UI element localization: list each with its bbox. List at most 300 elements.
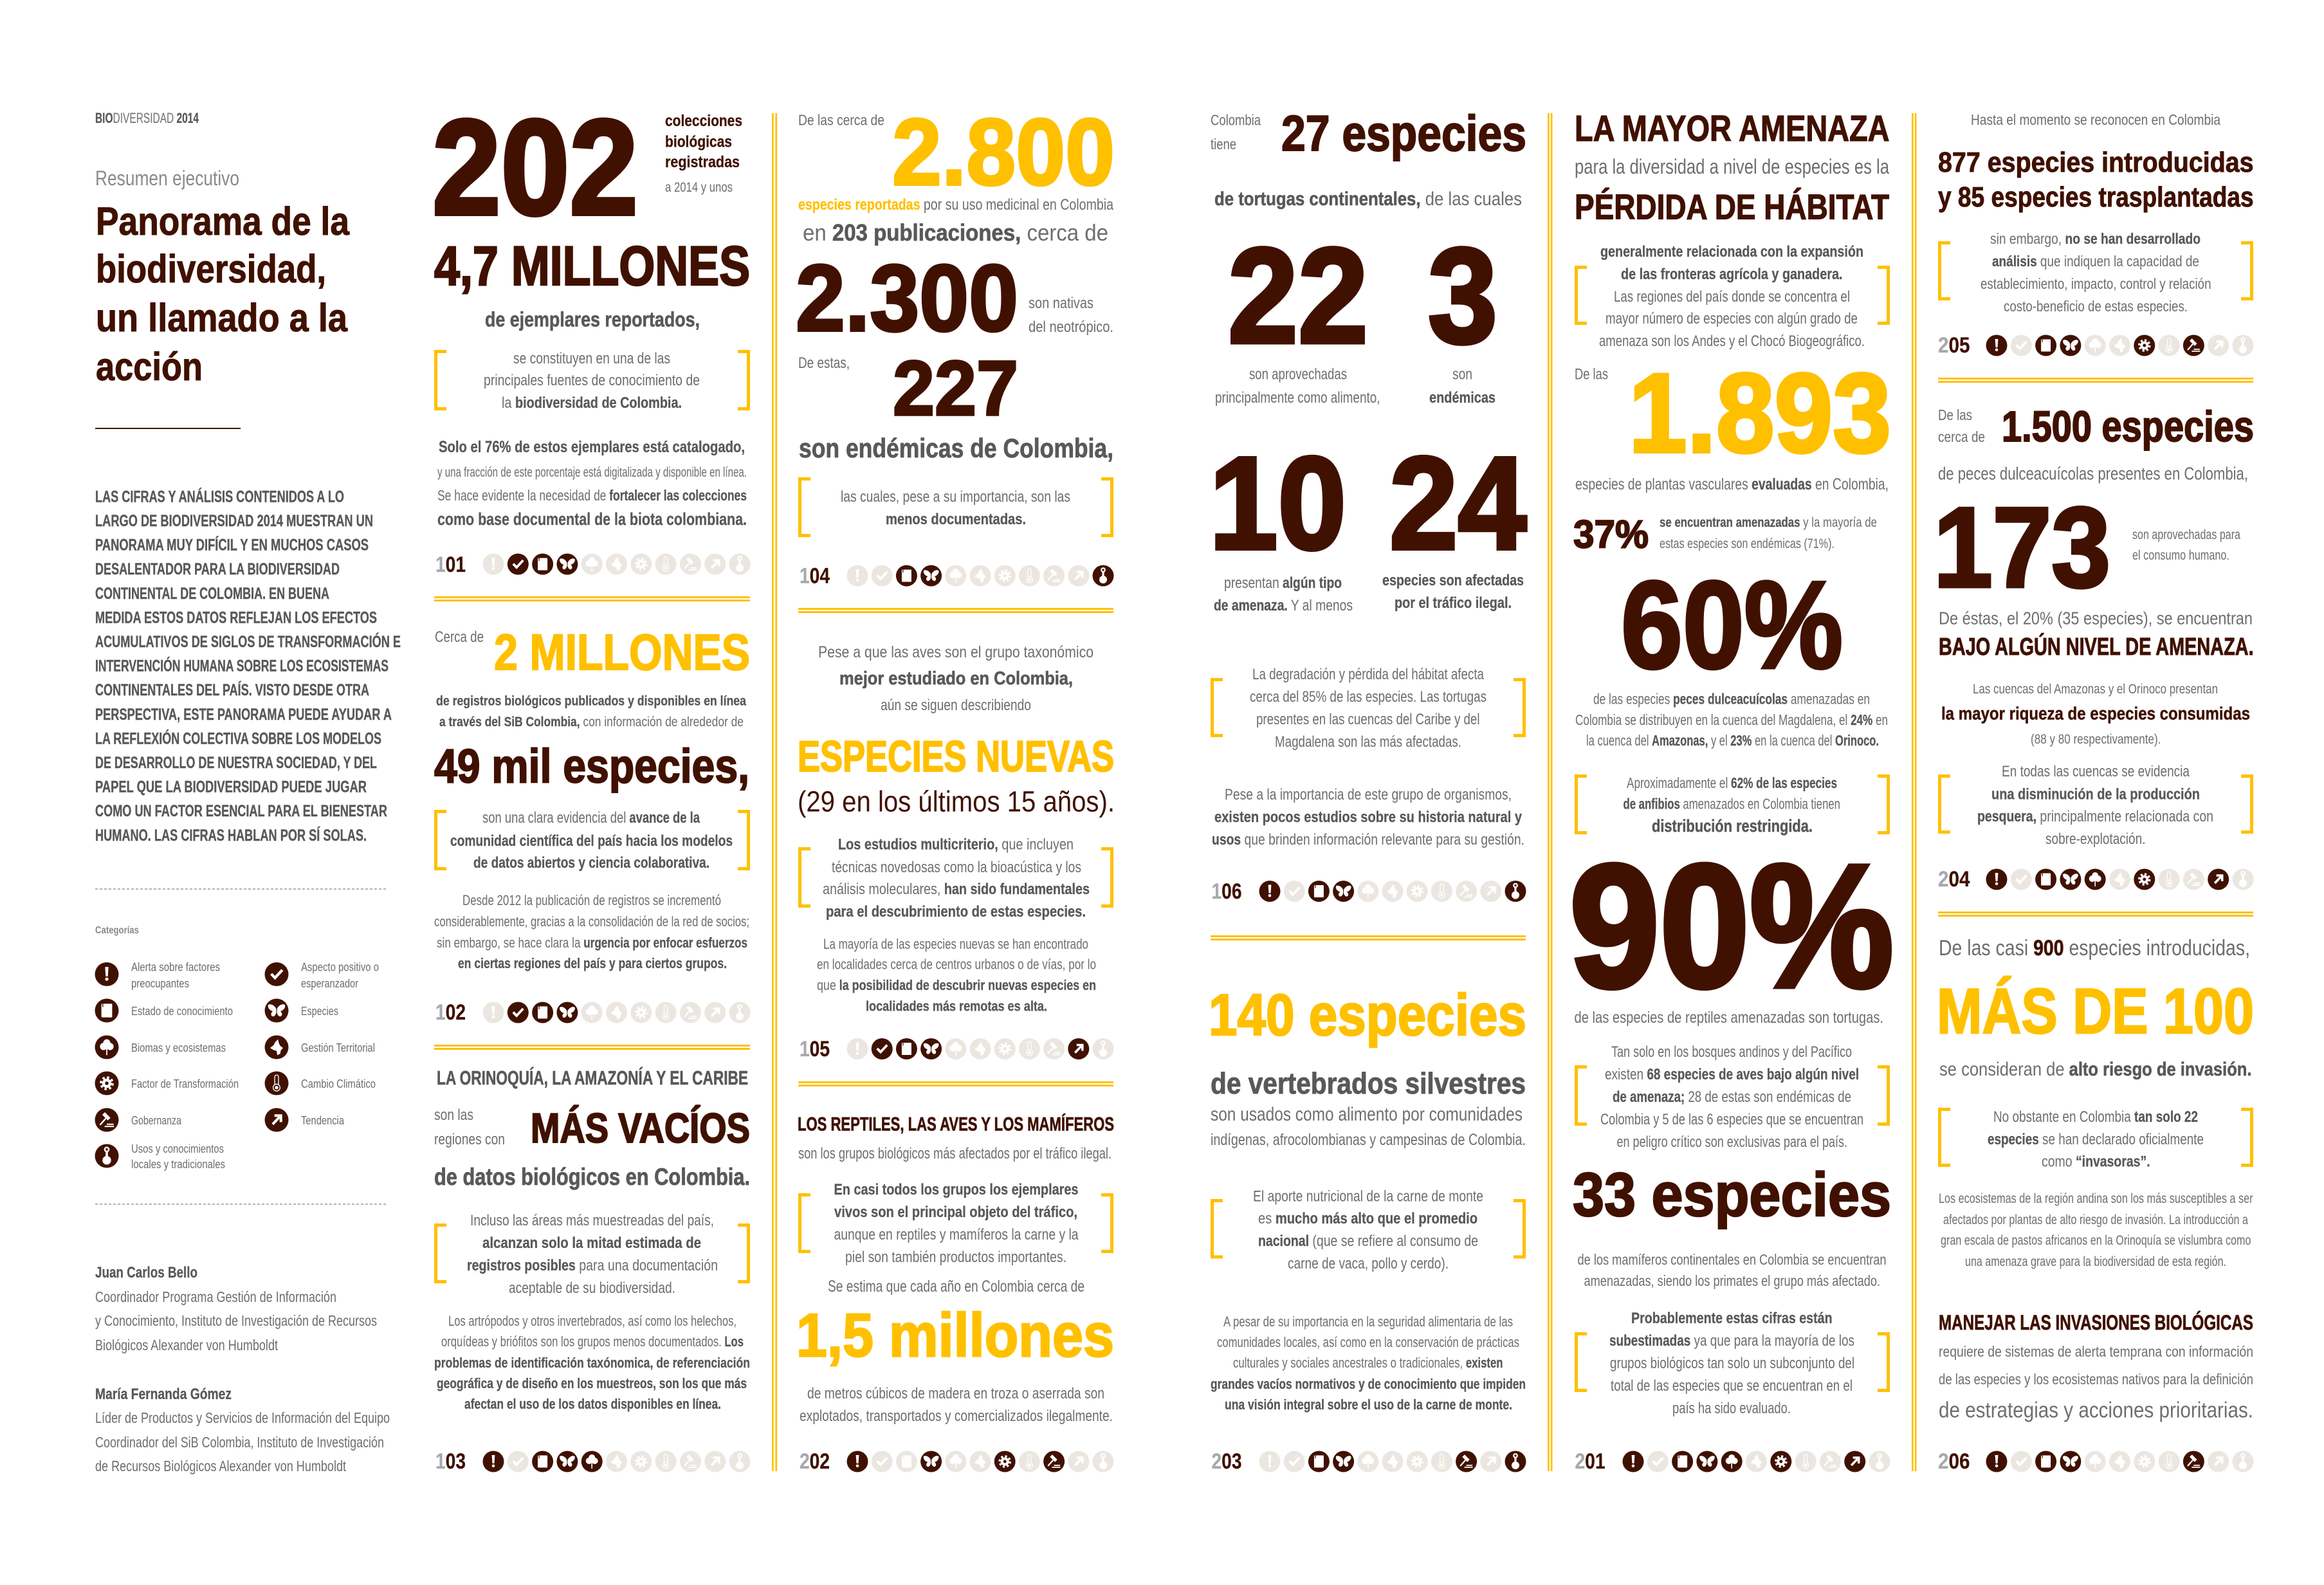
text block: de vertebrados silvestres <box>1211 1067 1526 1100</box>
stat caption: a 2014 y unos <box>665 180 733 195</box>
icon row: 101: 101 <box>435 553 466 577</box>
stat: 1.500 especies: De las <box>1938 407 1972 423</box>
callout: nacional (que se refiere al consumo de <box>1258 1232 1478 1250</box>
callout: costo-beneficio de estas especies. <box>2004 298 2188 315</box>
text block: de los mamíferos continentales en Colombia se encuentran <box>1577 1251 1886 1268</box>
icon row: 106 <box>1212 879 1526 904</box>
text block <box>1577 1251 1886 1289</box>
text block: sin embargo, se hace clara la urgencia por enfocar esfuerzos <box>437 935 747 951</box>
text block: en 203 publicaciones, cerca de <box>803 219 1108 246</box>
stat: 1,5 millones: Se estima que cada año en Colombia cerca de <box>828 1278 1084 1296</box>
stat: 1.893: 1.893 <box>1629 351 1891 476</box>
callout <box>436 350 749 412</box>
panel: column 5 <box>1934 111 2254 1474</box>
callout: de las fronteras agrícola y ganadera. <box>1621 266 1842 283</box>
heading: reptiles, aves, mamíferos: LOS REPTILES, LAS AVES Y LOS MAMÍFEROS <box>798 1113 1114 1135</box>
heading: manejar las invasiones <box>1939 1311 2253 1423</box>
stat: 1,5 millones: 1,5 millones <box>796 1301 1114 1370</box>
callout: la biodiversidad de Colombia. <box>502 394 682 412</box>
text block: existen pocos estudios sobre su historia natural y <box>1214 809 1523 826</box>
stat: 37% <box>1573 512 1877 556</box>
stat: 1.893: especies de plantas vasculares evaluadas en Colombia, <box>1575 475 1889 493</box>
text block: la cuenca del Amazonas, y el 23% en la cuenca del Orinoco. <box>1586 732 1879 749</box>
stat: 140 especies: 140 especies <box>1209 983 1526 1048</box>
stat: 2 millones: 2 MILLONES <box>494 623 750 681</box>
legend: categories: esperanzador <box>301 977 358 990</box>
stat: 2.300: 2.300 <box>796 246 1018 351</box>
stat: 27 especies: tiene <box>1211 136 1236 152</box>
callout <box>1576 774 1889 836</box>
stat: 1.500 especies: 1.500 especies <box>2002 403 2254 451</box>
icon row: 203: 203 <box>1212 1449 1241 1474</box>
stat: 173: el consumo humano. <box>2132 548 2229 563</box>
heading: especies nuevas <box>798 732 1115 818</box>
callout: de amenaza; 28 de estas son endémicas de <box>1613 1088 1851 1106</box>
text block: problemas de identificación taxónomica, de referenciación <box>434 1355 750 1371</box>
text block: Pese a la importancia de este grupo de organismos, <box>1225 786 1512 803</box>
heading: especies introducidas <box>1938 111 2254 213</box>
panel: introduction sidebar <box>95 110 401 1474</box>
callout: como “invasoras”. <box>2042 1153 2150 1171</box>
text block: Desde 2012 la publicación de registros se incrementó <box>462 892 721 908</box>
heading: más de 100: De las casi 900 especies introducidas, <box>1939 936 2250 960</box>
heading: más de 100: MÁS DE 100 <box>1937 975 2254 1047</box>
callout: Magdalena son las más afectadas. <box>1275 733 1461 751</box>
callout: existen 68 especies de aves bajo algún nivel <box>1605 1066 1859 1083</box>
callout <box>1576 1043 1889 1151</box>
stat: 1,5 millones <box>796 1278 1114 1370</box>
legend: categories: Usos y conocimientos <box>131 1142 224 1155</box>
callout: Probablemente estas cifras están <box>1631 1310 1833 1327</box>
text block <box>1212 786 1524 848</box>
icon row: 103: 103 <box>435 1449 466 1474</box>
callout: subestimadas ya que para la mayoría de los <box>1609 1332 1854 1350</box>
icon row: 104: 104 <box>800 563 830 588</box>
callout: cerca del 85% de las especies. Las tortugas <box>1250 688 1487 706</box>
intro paragraph: COMO UN FACTOR ESENCIAL PARA EL BIENESTAR <box>95 802 387 820</box>
stat: 27 especies: 27 especies <box>1281 105 1526 161</box>
callout <box>1212 666 1524 751</box>
stat: 24: 24 <box>1389 430 1526 577</box>
subheading: de ejemplares reportados, <box>485 307 700 331</box>
stat caption: registradas <box>665 153 740 171</box>
icon row: 205 <box>1938 333 2254 358</box>
callout: es mucho más alto que el promedio <box>1258 1210 1478 1227</box>
callout: total de las especies que se encuentran en el <box>1611 1377 1853 1395</box>
text block: especies reportadas por su uso medicinal en Colombia <box>798 196 1114 214</box>
authors <box>95 1264 390 1474</box>
icon row: 101 <box>435 553 750 577</box>
heading: más vacíos: son las <box>434 1106 473 1124</box>
heading: más de 100: se consideran de alto riesgo de invasión. <box>1939 1059 2251 1080</box>
legend: categories: Biomas y ecosistemas <box>131 1041 226 1054</box>
heading: más vacíos: regiones con <box>434 1131 505 1148</box>
title: un llamado a la <box>96 296 348 340</box>
icon row: 202 <box>800 1449 1114 1474</box>
authors: de Recursos Biológicos Alexander von Humboldt <box>95 1458 346 1474</box>
text block: Colombia se distribuyen en la cuenca del Magdalena, el 24% en <box>1575 711 1888 728</box>
icon row: 203 <box>1212 1449 1526 1474</box>
text block: y una fracción de este porcentaje está digitalizada y disponible en línea. <box>437 465 747 480</box>
text block: a través del SiB Colombia, con información de alrededor de <box>439 715 744 729</box>
callout: aceptable de su biodiversidad. <box>509 1279 675 1297</box>
stat: 2.800 <box>798 100 1115 205</box>
legend: categories: Especies <box>301 1005 338 1018</box>
icon row: 104 <box>800 563 1114 588</box>
heading: especies introducidas: 877 especies introducidas <box>1938 147 2254 178</box>
text block: una amenaza grave para la biodiversidad de esta región. <box>1965 1254 2226 1269</box>
intro paragraph: ACUMULATIVOS DE SIGLOS DE TRANSFORMACIÓN E <box>95 632 401 651</box>
callout <box>1212 1188 1524 1272</box>
callout: En casi todos los grupos los ejemplares <box>834 1181 1078 1198</box>
callout: aunque en reptiles y mamíferos la carne y la <box>834 1226 1079 1243</box>
text block: comunidades locales, así como en la conservación de prácticas <box>1217 1334 1519 1350</box>
stat: 2 millones: Cerca de <box>435 628 484 646</box>
legend: categories: Tendencia <box>301 1114 345 1127</box>
callout: vivos son el principal objeto del tráfico, <box>834 1204 1077 1221</box>
intro paragraph: HUMANO. LAS CIFRAS HABLAN POR SÍ SOLAS. <box>95 826 367 845</box>
text block: como base documental de la biota colombiana. <box>437 509 747 529</box>
callout: No obstante en Colombia tan solo 22 <box>1993 1108 2198 1126</box>
text block: orquídeas y briófitos son los grupos menos documentados. Los <box>441 1333 744 1350</box>
text block: usos que brinden información relevante para su gestión. <box>1212 831 1524 848</box>
intro paragraph: DESALENTADOR PARA LA BIODIVERSIDAD <box>95 560 340 578</box>
heading: la mayor amenaza: LA MAYOR AMENAZA <box>1575 108 1890 149</box>
heading: manejar las invasiones: requiere de sistemas de alerta temprana con información <box>1939 1343 2253 1360</box>
title: Panorama de la <box>96 199 350 243</box>
icon row: 102: 102 <box>435 1000 466 1025</box>
authors: Biológicos Alexander von Humboldt <box>95 1337 278 1353</box>
text block: La mayoría de las especies nuevas se han encontrado <box>823 936 1088 952</box>
callout: carne de vaca, pollo y cerdo). <box>1288 1255 1449 1272</box>
subheading: de tortugas continentales, de las cuales <box>1214 188 1522 210</box>
callout: generalmente relacionada con la expansión <box>1600 243 1863 261</box>
text block: Pese a que las aves son el grupo taxonómico <box>818 643 1093 661</box>
text block: localidades más remotas es alta. <box>866 998 1047 1014</box>
text block: aún se siguen describiendo <box>881 697 1031 714</box>
text block <box>1939 609 2254 747</box>
stat: 27 especies: Colombia <box>1211 112 1261 129</box>
stat: 49 mil especies: 49 mil especies, <box>434 740 749 792</box>
icon row: 202: 202 <box>800 1449 830 1474</box>
text block <box>1211 1067 1526 1149</box>
callout: análisis que indiquen la capacidad de <box>1992 253 2199 270</box>
text block: en ciertas regiones del país y para ciertos grupos. <box>458 955 727 971</box>
text block: considerablemente, gracias a la consolidación de la red de socios; <box>434 913 749 930</box>
text block: (88 y 80 respectivamente). <box>2031 732 2161 747</box>
callout: principales fuentes de conocimiento de <box>484 372 700 389</box>
panel: column 2 <box>796 100 1115 1474</box>
callout: distribución restringida. <box>1652 816 1813 836</box>
text block: que la posibilidad de descubrir nuevas especies en <box>817 977 1096 993</box>
panel: column 1 <box>432 91 750 1474</box>
callout: alcanzan solo la mitad estimada de <box>482 1234 701 1252</box>
stat: 227: 227 <box>893 344 1018 432</box>
subheading: son endémicas de Colombia, <box>799 433 1113 463</box>
stat: 90%: 90% <box>1569 829 1894 1024</box>
stat: 22: 22 <box>1228 220 1368 372</box>
authors: Juan Carlos Bello <box>95 1264 197 1281</box>
callout: Tan solo en los bosques andinos y del Pacífico <box>1611 1043 1852 1061</box>
kicker: Resumen ejecutivo <box>95 167 239 190</box>
running head: BIODIVERSIDAD 2014 <box>95 110 199 126</box>
icon row: 204: 204 <box>1938 867 1970 892</box>
stat: 173: 173 <box>1934 484 2110 611</box>
callout: En todas las cuencas se evidencia <box>2002 763 2190 780</box>
text block: grandes vacíos normativos y de conocimiento que impiden <box>1211 1376 1526 1392</box>
text block: una visión integral sobre el uso de la carne de monte. <box>1225 1397 1512 1413</box>
stat: 1.500 especies: cerca de <box>1938 428 1985 445</box>
intro paragraph <box>95 488 401 845</box>
authors: Coordinador Programa Gestión de Información <box>95 1288 336 1305</box>
intro paragraph: CONTINENTAL DE COLOMBIA. EN BUENA <box>95 585 329 603</box>
text block: De éstas, el 20% (35 especies), se encuentran <box>1939 609 2253 628</box>
stat: 227 <box>798 344 1018 432</box>
text block <box>437 438 747 529</box>
icon row: 103 <box>435 1449 750 1474</box>
text block: amenazadas, siendo los primates el grupo más afectado. <box>1584 1272 1880 1289</box>
callout: Aproximadamente el 62% de las especies <box>1627 774 1837 791</box>
text block <box>1939 1191 2253 1269</box>
legend: categories: preocupantes <box>131 977 189 990</box>
stat: 2.800: De las cerca de <box>798 112 884 129</box>
stat: 3: endémicas <box>1429 389 1496 407</box>
callout: en peligro crítico son exclusivas para el país. <box>1617 1133 1847 1151</box>
text block: de metros cúbicos de madera en troza o aserrada son <box>807 1385 1104 1402</box>
callout <box>800 836 1112 921</box>
intro paragraph: LAS CIFRAS Y ANÁLISIS CONTENIDOS A LO <box>95 488 344 506</box>
text block: en localidades cerca de centros urbanos o de vías, por lo <box>817 956 1096 973</box>
stat: 10: 10 <box>1209 430 1346 577</box>
callout <box>800 479 1112 535</box>
stat: 37%: 37% <box>1573 512 1649 556</box>
icon row: 204 <box>1938 867 2254 892</box>
text block: Los artrópodos y otros invertebrados, así como los helechos, <box>448 1313 737 1329</box>
text block: Solo el 76% de estos ejemplares está catalogado, <box>439 438 745 456</box>
stat: 33 especies: 33 especies <box>1573 1160 1891 1229</box>
callout: Colombia y 5 de las 6 especies que se encuentran <box>1600 1111 1863 1128</box>
intro paragraph: PERSPECTIVA, ESTE PANORAMA PUEDE AYUDAR A <box>95 706 392 724</box>
callout: amenaza son los Andes y el Chocó Biogeográfico. <box>1599 333 1865 350</box>
callout <box>1940 230 2251 315</box>
heading: especies introducidas: Hasta el momento se reconocen en Colombia <box>1971 111 2220 128</box>
text block: Las cuencas del Amazonas y el Orinoco presentan <box>1973 682 2218 697</box>
icon row: 205: 205 <box>1938 333 1970 358</box>
text block <box>434 892 749 971</box>
callout <box>1576 243 1889 350</box>
callout: sin embargo, no se han desarrollado <box>1990 230 2200 247</box>
callout: de anfibios amenazados en Colombia tienen <box>1624 796 1840 812</box>
stat: 60%: 60% <box>1621 555 1843 694</box>
intro paragraph: PAPEL QUE LA BIODIVERSIDAD PUEDE JUGAR <box>95 778 367 796</box>
callout <box>1940 1108 2251 1171</box>
callout: comunidad científica del país hacia los modelos <box>450 832 733 850</box>
heading: la mayor amenaza: PÉRDIDA DE HÁBITAT <box>1575 187 1889 226</box>
authors: y Conocimiento, Instituto de Investigación de Recursos <box>95 1312 377 1329</box>
text block <box>817 936 1096 1014</box>
stat: 2.800: 2.800 <box>892 100 1115 205</box>
callout: establecimiento, impacto, control y relación <box>1981 275 2211 292</box>
text block: indígenas, afrocolombianas y campesinas de Colombia. <box>1211 1131 1526 1149</box>
stat: 37%: estas especies son endémicas (71%). <box>1660 536 1834 551</box>
authors: María Fernanda Gómez <box>95 1386 232 1403</box>
text block: Se hace evidente la necesidad de fortalecer las colecciones <box>437 487 747 504</box>
callout <box>800 1181 1112 1266</box>
stat: 1.893 <box>1575 351 1891 493</box>
stat: 10: presentan algún tipo <box>1224 574 1342 592</box>
heading: más vacíos: LA ORINOQUÍA, LA AMAZONÍA Y EL CARIBE <box>437 1067 748 1089</box>
heading: más vacíos: MÁS VACÍOS <box>531 1104 750 1151</box>
text block <box>1211 1314 1526 1413</box>
stat: 90%: de las especies de reptiles amenazadas son tortugas. <box>1575 1009 1883 1027</box>
text block: explotados, transportados y comercializados ilegalmente. <box>800 1407 1113 1425</box>
callout: El aporte nutricional de la carne de monte <box>1253 1188 1483 1205</box>
callout: mayor número de especies con algún grado de <box>1606 310 1858 327</box>
intro paragraph: INTERVENCIÓN HUMANA SOBRE LOS ECOSISTEMAS <box>95 656 389 675</box>
intro paragraph: LA REFLEXIÓN COLECTIVA SOBRE LOS MODELOS <box>95 728 381 747</box>
stat: 4,7 millones: 4,7 MILLONES <box>434 235 750 297</box>
legend: categories: Factor de Transformación <box>131 1077 239 1090</box>
icon row: 106: 106 <box>1212 879 1241 904</box>
text block <box>818 643 1093 714</box>
callout: son una clara evidencia del avance de la <box>482 809 700 827</box>
stat: 10: de amenaza. Y al menos <box>1214 597 1353 614</box>
title: biodiversidad, <box>96 247 326 291</box>
stat caption: biológicas <box>665 133 732 151</box>
callout: análisis moleculares, han sido fundamentales <box>823 881 1090 898</box>
legend: categories: Categorías <box>95 925 139 936</box>
callout: las cuales, pese a su importancia, son las <box>841 488 1070 506</box>
stat: 173: son aprovechadas para <box>2132 527 2240 542</box>
legend: categories: Aspecto positivo o <box>301 961 379 974</box>
callout: Los estudios multicriterio, que incluyen <box>838 836 1074 853</box>
title: acción <box>96 345 203 389</box>
legend: categories: Gobernanza <box>131 1114 182 1127</box>
legend: categories: locales y tradicionales <box>131 1158 225 1171</box>
stat: 27 especies <box>1211 105 1526 161</box>
panel: column 4 <box>1569 108 1894 1474</box>
stat: 173 <box>1934 484 2240 611</box>
stat caption <box>665 112 742 195</box>
text block: afectan el uso de los datos disponibles en línea. <box>464 1396 721 1412</box>
callout: país ha sido evaluado. <box>1672 1400 1791 1417</box>
text block: de las especies peces dulceacuícolas amenazadas en <box>1593 691 1870 708</box>
stat: 2.300: son nativas <box>1029 295 1093 312</box>
callout: se constituyen en una de las <box>513 350 670 367</box>
stat: 22: son aprovechadas <box>1249 365 1347 383</box>
legend: categories: Alerta sobre factores <box>131 961 220 974</box>
callout: presentes en las cuencas del Caribe y del <box>1256 711 1479 728</box>
authors: Coordinador del SiB Colombia, Instituto de Investigación <box>95 1434 384 1451</box>
callout: sobre-explotación. <box>2045 830 2146 848</box>
text block: geográfica y de diseño en los muestreos, son los que más <box>437 1375 747 1391</box>
callout: menos documentadas. <box>886 511 1026 528</box>
icon row: 102 <box>435 1000 750 1025</box>
text block <box>436 693 746 729</box>
heading: especies introducidas: y 85 especies trasplantadas <box>1938 181 2254 213</box>
icon row: 201: 201 <box>1575 1449 1606 1474</box>
stat: 24: por el tráfico ilegal. <box>1395 594 1512 612</box>
callout: piel son también productos importantes. <box>845 1249 1066 1266</box>
callout <box>1940 763 2251 848</box>
panel: column 3 <box>1209 105 1526 1474</box>
icon row: 206: 206 <box>1938 1449 1970 1474</box>
heading: la mayor amenaza: para la diversidad a nivel de especies es la <box>1575 155 1889 178</box>
heading: reptiles, aves, mamíferos <box>798 1113 1114 1162</box>
stat: 202 colecciones: 202 <box>432 91 638 243</box>
callout: grupos biológicos tan solo un subconjunto del <box>1610 1355 1854 1372</box>
stat: 1.893: De las <box>1575 365 1608 383</box>
intro paragraph: CONTINENTALES DEL PAÍS. VISTO DESDE OTRA <box>95 681 369 699</box>
text block: culturales y sociales ancestrales o tradicionales, existen <box>1233 1355 1503 1371</box>
legend: categories: Cambio Climático <box>301 1077 376 1090</box>
callout <box>1576 1310 1889 1417</box>
icon row: 206 <box>1938 1449 2254 1474</box>
heading: manejar las invasiones: de estrategias y acciones prioritarias. <box>1939 1398 2253 1423</box>
text block: A pesar de su importancia en la seguridad alimentaria de las <box>1223 1314 1513 1330</box>
text block <box>800 1385 1113 1425</box>
callout: La degradación y pérdida del hábitat afecta <box>1252 666 1485 683</box>
legend: categories: Estado de conocimiento <box>131 1005 233 1018</box>
callout: una disminución de la producción <box>1991 785 2200 803</box>
callout: pesquera, principalmente relacionada con <box>1977 808 2213 825</box>
stat: 227: De estas, <box>798 354 850 372</box>
intro paragraph: LARGO DE BIODIVERSIDAD 2014 MUESTRAN UN <box>95 512 373 530</box>
legend: categories <box>95 925 379 1171</box>
heading: reptiles, aves, mamíferos: son los grupos biológicos más afectados por el tráfico ilegal. <box>798 1145 1112 1162</box>
icon row: 201 <box>1575 1449 1890 1474</box>
heading: especies nuevas: ESPECIES NUEVAS <box>798 732 1114 781</box>
stat: 24: especies son afectadas <box>1382 572 1524 589</box>
text block: mejor estudiado en Colombia, <box>839 668 1073 689</box>
callout: técnicas novedosas como la bioacústica y los <box>832 859 1081 876</box>
intro paragraph: DE DESARROLLO DE NUESTRA SOCIEDAD, Y DEL <box>95 754 377 772</box>
callout: de datos abiertos y ciencia colaborativa. <box>473 854 709 872</box>
heading: más vacíos <box>434 1067 750 1190</box>
text block: de registros biológicos publicados y disponibles en línea <box>436 693 746 709</box>
heading: especies nuevas: (29 en los últimos 15 años). <box>798 785 1115 818</box>
callout: registros posibles para una documentación <box>467 1257 718 1274</box>
intro paragraph: MEDIDA ESTOS DATOS REFLEJAN LOS EFECTOS <box>95 609 377 627</box>
stat: 1.500 especies: de peces dulceacuícolas presentes en Colombia, <box>1938 463 2248 484</box>
callout: para el descubrimiento de estas especies. <box>826 903 1086 921</box>
icon row: 105: 105 <box>800 1037 830 1061</box>
stat caption: colecciones <box>665 112 742 130</box>
authors: Líder de Productos y Servicios de Información del Equipo <box>95 1409 390 1426</box>
stat: 37%: se encuentran amenazadas y la mayoría de <box>1660 515 1877 530</box>
text block: son usados como alimento por comunidades <box>1211 1104 1523 1125</box>
stat: 2.300: del neotrópico. <box>1029 318 1113 336</box>
callout: especies se han declarado oficialmente <box>1988 1131 2204 1148</box>
text block <box>434 1313 750 1412</box>
heading: la mayor amenaza <box>1575 108 1890 226</box>
callout <box>436 809 749 872</box>
legend: categories: Gestión Territorial <box>301 1041 375 1054</box>
text block <box>1575 691 1888 749</box>
title <box>96 199 350 389</box>
stat: 1.500 especies <box>1938 403 2254 484</box>
callout: Incluso las áreas más muestreadas del país, <box>470 1212 714 1229</box>
callout: Las regiones del país donde se concentra el <box>1614 288 1850 306</box>
callout <box>436 1212 749 1297</box>
text block <box>798 196 1114 246</box>
text block: la mayor riqueza de especies consumidas <box>1941 704 2250 723</box>
stat: 3: son <box>1452 365 1472 383</box>
intro paragraph: PANORAMA MUY DIFÍCIL Y EN MUCHOS CASOS <box>95 536 369 554</box>
icon row: 105 <box>800 1037 1114 1061</box>
heading: más vacíos: de datos biológicos en Colombia. <box>434 1164 750 1190</box>
stat: 22: principalmente como alimento, <box>1215 389 1380 407</box>
